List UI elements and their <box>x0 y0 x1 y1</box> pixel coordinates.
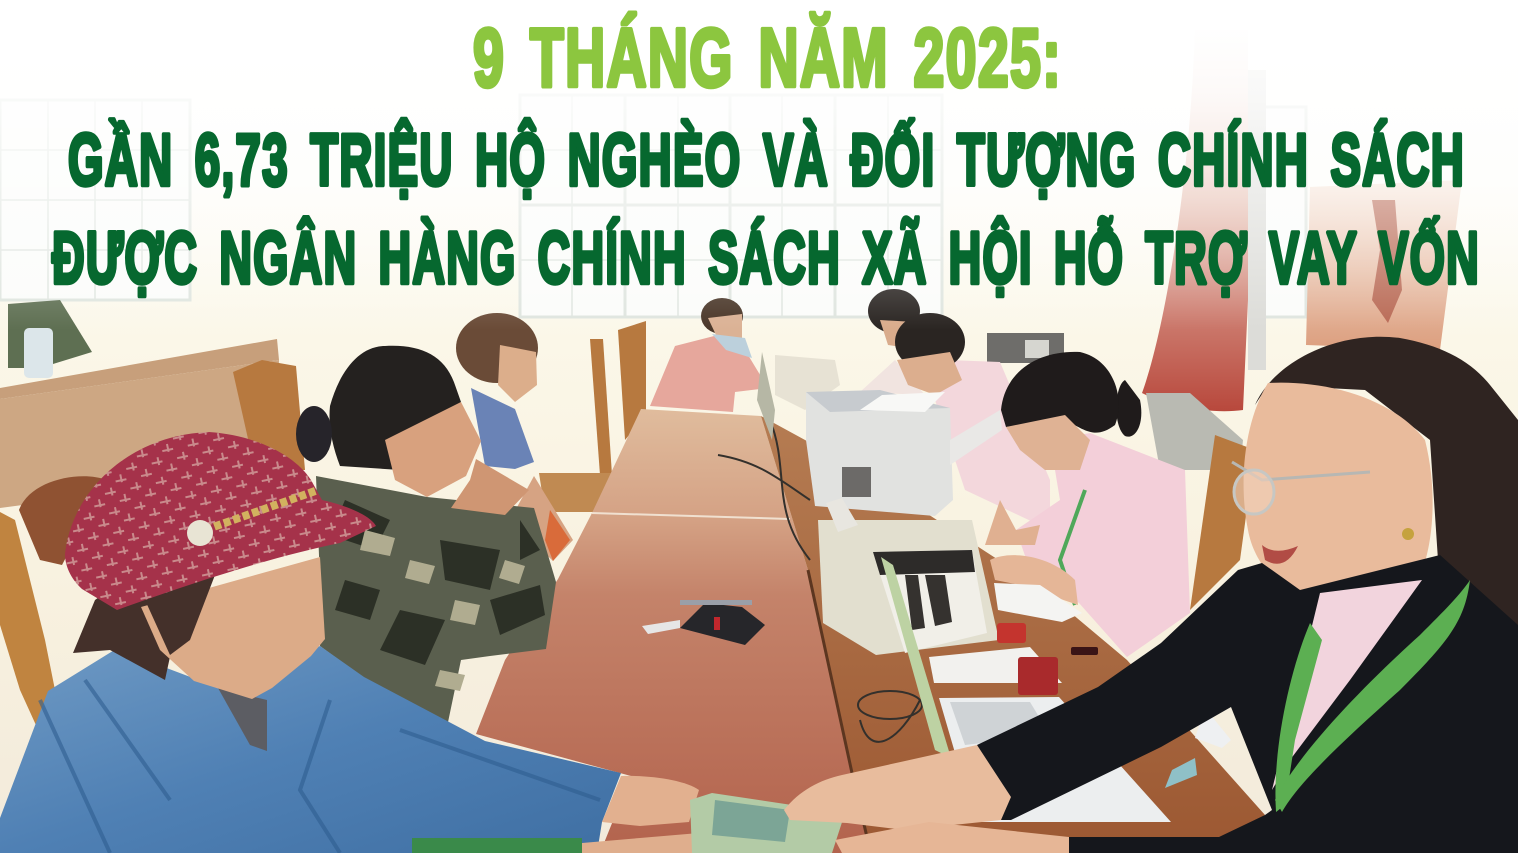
black card reader on table <box>642 600 765 645</box>
banknote counting machine <box>818 498 999 655</box>
red banner on wall <box>1306 180 1462 350</box>
cables on table <box>718 420 922 742</box>
woman in blue shirt <box>456 313 573 561</box>
equipment at far end of table <box>757 352 840 440</box>
left background desk <box>0 339 279 508</box>
woman in pink striped shirt <box>985 352 1190 657</box>
table seam <box>808 570 870 850</box>
woman with red hat and denim jacket <box>0 432 699 853</box>
stamp and papers <box>929 623 1098 695</box>
long central table <box>476 409 872 853</box>
white fade over top of photo <box>0 0 1518 330</box>
green folder at bottom <box>412 838 582 853</box>
laptop <box>881 557 1197 822</box>
right table <box>761 416 1265 853</box>
soldier in background <box>8 300 92 378</box>
woman in pink at far end <box>650 298 768 412</box>
stored boxes behind staff <box>987 333 1243 470</box>
dark pillar beside curtain <box>1248 70 1266 370</box>
woman in camouflage jacket <box>296 346 556 727</box>
stack of banknotes <box>690 793 845 853</box>
title <box>52 11 1480 299</box>
curtain <box>1142 30 1248 411</box>
printer <box>806 390 1002 516</box>
windows on back wall <box>0 95 1306 317</box>
bank staff men <box>860 289 1050 530</box>
papers beside laptop <box>1195 708 1231 748</box>
wooden chairs <box>0 321 1255 734</box>
title line 1: 9 THÁNG NĂM 2025: <box>473 11 1062 104</box>
loan officer woman in black jacket <box>784 337 1518 853</box>
